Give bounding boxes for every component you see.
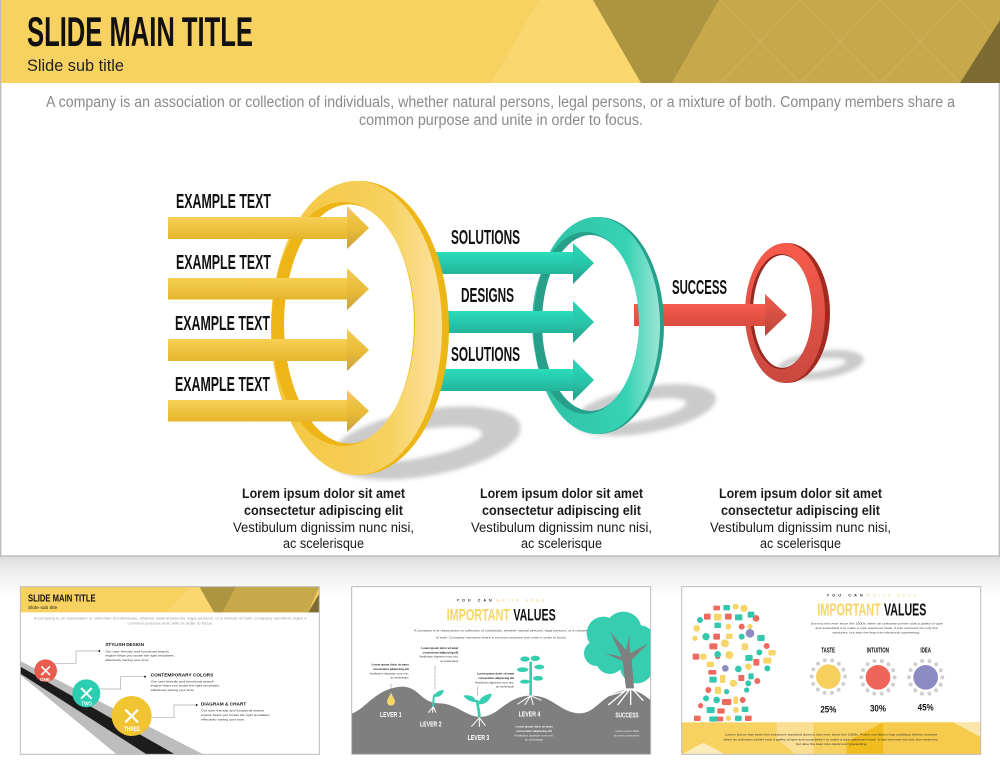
arrow labels: EXAMPLE TEXT xyxy=(175,374,270,396)
eyebrow xyxy=(827,594,917,598)
lever 1 note: ac scelerisque xyxy=(391,676,409,680)
icon: young plant xyxy=(517,656,544,705)
heading: VALUES xyxy=(513,605,556,624)
hill labels xyxy=(380,711,639,742)
teal arrow 1 xyxy=(435,243,594,284)
teal arrow 2 xyxy=(435,301,594,343)
metric: intuition xyxy=(861,648,895,714)
thumbnail 1 subtitle: Slide sub title xyxy=(28,605,58,610)
item: diagram and chart: DIAGRAM & CHART xyxy=(201,701,247,706)
intro: Dummy text ever since the 1500s, when an unknown printer took a galley of type xyxy=(811,622,943,626)
head of icons xyxy=(692,604,776,722)
tree xyxy=(584,612,657,705)
text block 1: consectetur adipiscing elit xyxy=(244,503,403,518)
text block 1 xyxy=(233,486,414,551)
thumbnail 1 header xyxy=(20,587,319,612)
diagram: teal arrows xyxy=(435,243,594,401)
hills xyxy=(352,687,651,754)
icon: sprout 2 xyxy=(463,694,492,727)
lever 4 note: Lorem ipsum dolor sit amet xyxy=(515,725,553,729)
footer band xyxy=(682,722,981,754)
text block 3 xyxy=(710,486,891,551)
item: contemporary colors: Our user-friendly and functional search xyxy=(151,679,214,683)
text block 3: Vestibulum dignissim nunc nisi, xyxy=(710,520,891,535)
arrow labels: SOLUTIONS xyxy=(451,344,520,366)
item: diagram and chart xyxy=(201,701,271,721)
heading: IMPORTANT xyxy=(817,600,881,620)
text block 2: Lorem ipsum dolor sit amet xyxy=(480,486,643,501)
diagram: red ring and arrow xyxy=(634,243,830,383)
lever 1 note xyxy=(370,663,409,680)
text block 3: consectetur adipiscing elit xyxy=(721,503,880,518)
arrow labels: SOLUTIONS xyxy=(451,227,520,249)
panel: thumbnail 3 values xyxy=(682,587,981,754)
text block 3: Lorem ipsum dolor sit amet xyxy=(719,486,882,501)
hill labels: LEVER 4 xyxy=(519,711,540,718)
hill labels: LEVER 3 xyxy=(468,735,489,742)
yellow arrow 4 xyxy=(168,390,369,432)
subtitle: Slide sub title xyxy=(27,56,124,75)
success note: sit amet consectetur xyxy=(614,733,639,737)
heading: IMPORTANT xyxy=(447,605,510,624)
marker: one: ONE xyxy=(40,677,51,683)
arrow labels xyxy=(175,191,727,396)
metric: taste: 25% xyxy=(820,704,837,714)
item: contemporary colors: CONTEMPORARY COLORS xyxy=(151,672,213,677)
arrow labels: EXAMPLE TEXT xyxy=(176,252,271,274)
lever 3 note: consectetur adipiscing elit xyxy=(478,676,514,680)
red arrow xyxy=(634,294,787,336)
item: diagram and chart: Our user-friendly and functional search xyxy=(201,709,265,713)
footer text: Lorem Ipsum has been the industry's standard dummy text ever since the 1500s. Fusce non libero fugi unditiaco bibirun mesoke xyxy=(725,733,938,737)
eyebrow: WRITE HERE xyxy=(867,594,917,598)
footer text: when an unknown printer took a galley of type and scrambled it to make a type specimen book. It has survived not only five centuries, xyxy=(723,737,939,741)
text block 1: Lorem ipsum dolor sit amet xyxy=(242,486,405,501)
lever 3 note: Lorem ipsum dolor sit amet xyxy=(477,672,514,676)
metric: intuition: INTUITION xyxy=(867,648,889,655)
lever 4 note: consectetur adipiscing elit xyxy=(516,729,552,733)
lever 3 note: ac scelerisque xyxy=(496,685,514,689)
yellow arrow 2 xyxy=(168,268,369,310)
diagram: teal ring xyxy=(532,217,664,434)
arrow labels: SUCCESS xyxy=(672,277,727,299)
icon: sprout 1 xyxy=(428,690,444,713)
text block 2: consectetur adipiscing elit xyxy=(482,503,641,518)
lever 1 note: consectetur adipiscing elit xyxy=(373,667,409,671)
metric: intuition: 30% xyxy=(870,704,887,714)
item: contemporary colors: effectively saving your time. xyxy=(151,688,195,692)
hill labels: LEVER 2 xyxy=(420,722,442,729)
ring shadows xyxy=(324,345,866,492)
item: stylish design: effectively saving your time. xyxy=(105,658,150,662)
intro: of both. Company members share a common purpose and unite in order to focus. xyxy=(436,635,567,639)
panel: main slide xyxy=(1,0,1000,556)
heading: VALUES xyxy=(884,600,926,620)
thumbnail 1 intro xyxy=(34,616,307,625)
intro xyxy=(811,622,943,634)
text block 1: Vestibulum dignissim nunc nisi, xyxy=(233,520,414,535)
lever 2 note xyxy=(419,646,459,663)
marker: three: THREE xyxy=(124,726,140,733)
text block 3: ac scelerisque xyxy=(760,536,841,551)
hill labels: SUCCESS xyxy=(615,713,639,720)
eyebrow: WRITE HERE xyxy=(496,599,545,603)
metric: idea xyxy=(909,648,942,713)
marker: two: TWO xyxy=(81,702,92,708)
connectors xyxy=(55,651,196,718)
marker: three xyxy=(112,696,152,736)
road xyxy=(20,661,203,754)
footer text: but also the leap into electronic typesetting xyxy=(796,742,867,746)
text block 2 xyxy=(471,486,652,551)
thumbnail 1 intro: A company is an association or collection of individuals, whether natural persons, legal persons, or a mixture of both. Company members share a xyxy=(34,616,307,620)
lever 2 note: Vestibulum dignissim nunc nisi, xyxy=(419,655,459,659)
title: SLIDE MAIN TITLE xyxy=(27,8,253,55)
lever 4 note xyxy=(514,725,554,742)
yellow arrow 1 xyxy=(168,206,369,249)
hill labels: LEVER 1 xyxy=(380,712,402,719)
lever 3 note xyxy=(475,672,514,689)
metric: idea: 45% xyxy=(918,703,934,713)
text block 2: ac scelerisque xyxy=(521,536,602,551)
item: stylish design: STYLISH DESIGN xyxy=(105,642,144,647)
arrow labels: EXAMPLE TEXT xyxy=(176,191,271,213)
eyebrow: YOU CAN xyxy=(457,599,492,603)
footer text xyxy=(723,733,939,746)
eyebrow: YOU CAN xyxy=(827,594,863,598)
intro: and scrambled it to make a type specimen book. It has survived not only five xyxy=(815,626,938,630)
lever 2 note: consectetur adipiscing elit xyxy=(423,650,458,654)
teal arrow 3 xyxy=(435,359,594,401)
intro xyxy=(414,629,588,639)
thumbnail 1 title: SLIDE MAIN TITLE xyxy=(28,594,96,605)
intro text xyxy=(46,94,955,129)
lever 1 note: Vestibulum dignissim nunc nisi, xyxy=(370,671,409,675)
intro text: common purpose and unite in order to focus. xyxy=(359,112,643,129)
lever 3 note: Vestibulum dignissim nunc nisi, xyxy=(475,680,514,684)
intro: centuries, but also the leap into electronic typesetting. xyxy=(832,630,921,634)
icon: drop xyxy=(387,692,395,706)
lever 2 note: ac scelerisque xyxy=(440,659,459,663)
metric: idea: IDEA xyxy=(920,648,931,655)
eyebrow xyxy=(457,599,545,603)
lever 1 note: Lorem ipsum dolor sit amet xyxy=(372,663,409,667)
text block 2: Vestibulum dignissim nunc nisi, xyxy=(471,520,652,535)
item: diagram and chart: engine helps you locate the right templates, xyxy=(201,713,271,717)
item: stylish design xyxy=(105,642,175,662)
marker: two xyxy=(72,679,100,708)
item: diagram and chart: effectively saving your time. xyxy=(201,717,245,721)
yellow arrow 3 xyxy=(168,329,369,371)
success note xyxy=(614,729,639,737)
item: contemporary colors: engine helps you locate the right templates, xyxy=(151,684,220,688)
arrow labels: EXAMPLE TEXT xyxy=(175,313,270,335)
item: contemporary colors xyxy=(151,672,220,692)
connector dots xyxy=(98,650,198,706)
arrow labels: DESIGNS xyxy=(461,285,514,307)
lever 2 note: Lorem ipsum dolor sit amet xyxy=(421,646,458,650)
lever 4 note: ac scelerisque xyxy=(525,738,543,742)
pointers xyxy=(391,666,478,696)
panel: thumbnail 1 road diagram xyxy=(20,587,319,754)
metric: taste: TASTE xyxy=(821,648,835,655)
diagram: yellow ring xyxy=(271,181,449,475)
marker: one xyxy=(34,659,57,683)
thumbnail 1 intro: common purpose and unite in order to focus. xyxy=(127,621,213,625)
item: stylish design: engine helps you locate the right templates, xyxy=(105,654,175,658)
page background shadow xyxy=(0,556,1000,596)
header band xyxy=(1,0,1000,83)
panel: thumbnail 2 growth diagram xyxy=(352,587,657,754)
item: stylish design: Our user-friendly and functional search xyxy=(105,649,169,653)
text block 1: ac scelerisque xyxy=(283,536,364,551)
metric: taste xyxy=(812,648,845,714)
intro: A company is an association or collection of individuals, whether natural persons, legal persons, or a mixture xyxy=(414,629,588,633)
diagram: yellow arrows xyxy=(168,206,369,432)
success note: Lorem ipsum dolor xyxy=(616,729,639,733)
lever 4 note: Vestibulum dignissim nunc nisi, xyxy=(514,733,554,737)
